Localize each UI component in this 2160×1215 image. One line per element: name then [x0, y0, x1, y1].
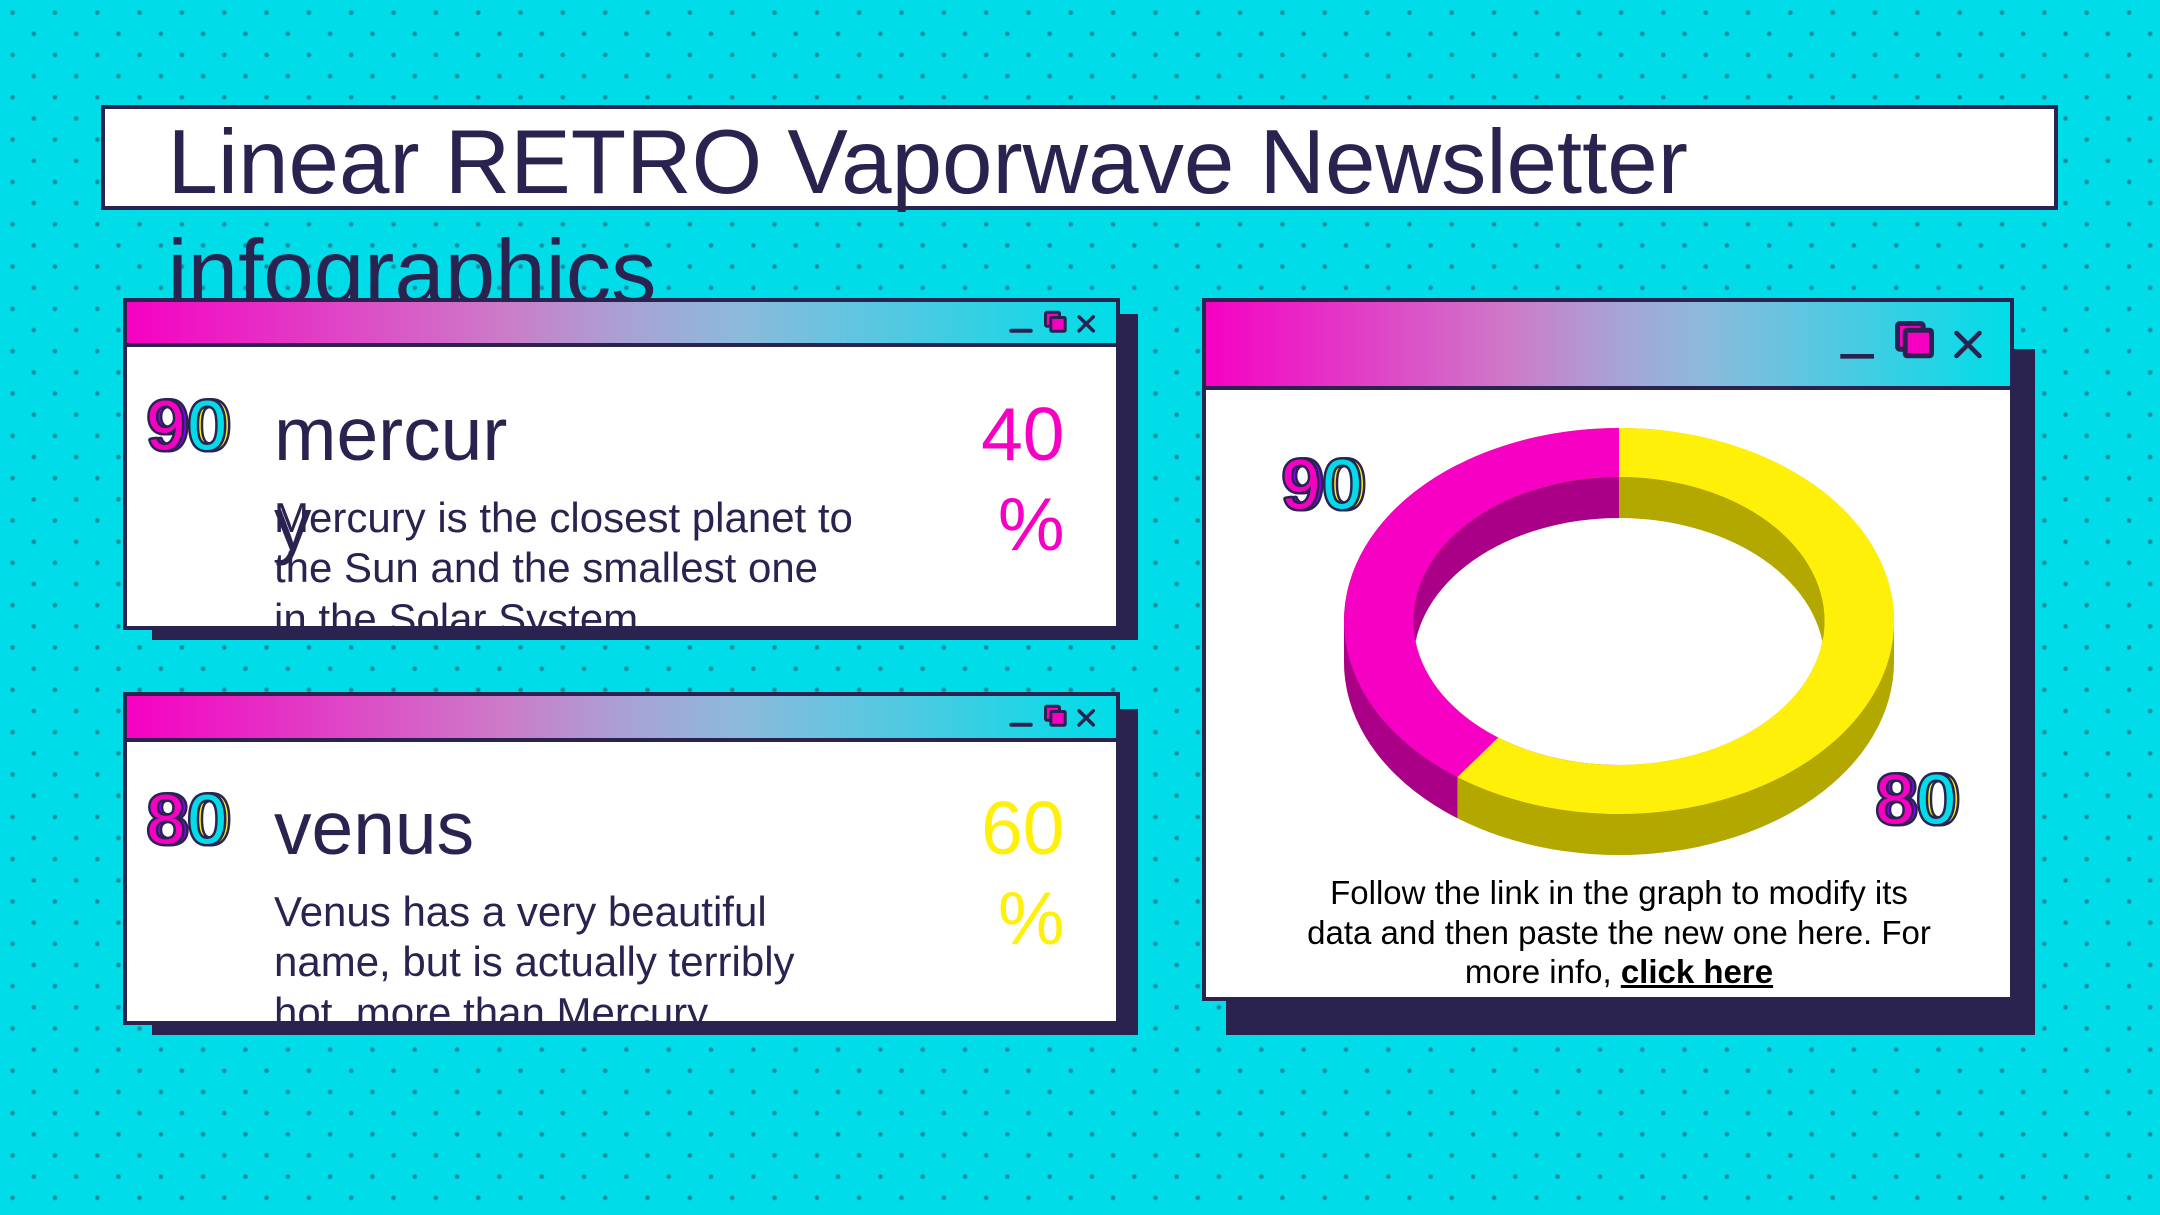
window shadow: [152, 314, 1138, 640]
panel: venus window: [123, 692, 1138, 1035]
title box: [101, 105, 2058, 210]
icon: retro 90 badge: 9: [146, 386, 185, 464]
title bar: [127, 696, 1116, 742]
icon: window controls: [1009, 704, 1096, 727]
icon: retro 90 badge: 9: [1281, 446, 1320, 524]
title bar: [127, 302, 1116, 347]
window shadow: [152, 709, 1138, 1035]
icon: window controls: [1840, 321, 1982, 359]
heading: venus: venus: [274, 786, 474, 870]
stat: 40 percent: %: [998, 482, 1064, 566]
text: chart caption: data and then paste the new one here. For: [1307, 914, 1931, 951]
stat: 40 percent: [981, 392, 1064, 566]
text: venus description: [274, 888, 795, 1025]
chart window frame: [1202, 298, 2014, 1001]
icon: retro 80 badge: [1875, 760, 1960, 838]
icon: retro 80 badge: 0: [1921, 760, 1960, 838]
icon: retro 90 badge: 0: [1323, 446, 1362, 524]
window shadow: [1226, 349, 2035, 1035]
icon: retro 80 badge: [146, 780, 231, 858]
stat: 60 percent: [981, 786, 1064, 960]
text: mercury description: the Sun and the smallest one: [274, 544, 818, 591]
icon: retro 90 badge: 9: [150, 386, 189, 464]
icon: retro 80 badge: 8: [1875, 760, 1914, 838]
mercury window frame: [123, 298, 1120, 630]
stat: 40 percent: 40: [981, 392, 1064, 476]
venus window frame: [123, 692, 1120, 1025]
icon: retro 80 badge: 8: [1879, 760, 1918, 838]
icon: retro 90 badge: 0: [188, 386, 227, 464]
heading: mercury: mercur: [274, 392, 507, 476]
panel: donut chart window: [1202, 298, 2035, 1035]
icon: retro 90 badge: 9: [1285, 446, 1324, 524]
icon: retro 90 badge: [1281, 446, 1366, 524]
text: mercury description: Mercury is the closest planet to: [274, 494, 853, 541]
text: venus description: name, but is actually terribly: [274, 938, 795, 985]
icon: retro 90 badge: 0: [1327, 446, 1366, 524]
icon: retro 90 badge: [146, 386, 231, 464]
title: Linear RETRO Vaporwave Newsletter: [168, 112, 1688, 213]
icon: retro 80 badge: 0: [188, 780, 227, 858]
heading: mercury: [274, 392, 507, 566]
icon: retro 80 badge: 8: [150, 780, 189, 858]
title: [168, 112, 1688, 323]
text: venus description: Venus has a very beautiful: [274, 888, 767, 935]
stat: 60 percent: %: [998, 876, 1064, 960]
panel: mercury window: [123, 298, 1138, 640]
text: chart caption: more info, click here: [1465, 953, 1773, 990]
donut chart: [1344, 428, 1894, 855]
heading: mercury: y: [274, 482, 312, 566]
title bar: [1206, 302, 2010, 390]
icon: retro 90 badge: 0: [192, 386, 231, 464]
text: mercury description: [274, 494, 853, 630]
text: chart caption: Follow the link in the graph to modify its: [1330, 874, 1908, 911]
icon: retro 80 badge: 0: [192, 780, 231, 858]
icon: retro 80 badge: 0: [1917, 760, 1956, 838]
icon: window controls: [1009, 310, 1096, 333]
stat: 60 percent: 60: [981, 786, 1064, 870]
title: infographics: [168, 222, 656, 323]
icon: retro 80 badge: 8: [146, 780, 185, 858]
text: chart caption: [1307, 874, 1931, 990]
